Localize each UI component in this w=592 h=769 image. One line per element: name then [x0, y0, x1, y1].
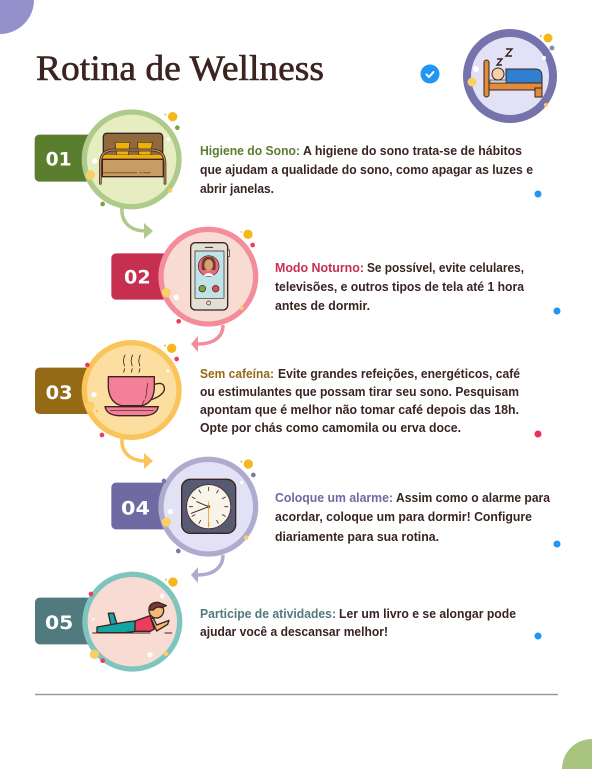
dot: blue 3 [554, 540, 560, 548]
step 4 graphic [111, 459, 256, 554]
ring [84, 112, 179, 207]
dot: blue 1 [534, 190, 542, 198]
text: sem cafeina: Opte por chás como camomila ou erva doce. [200, 421, 461, 435]
text: coloque um alarme: acordar, coloque um para dormir! Configure [275, 510, 532, 524]
ring [84, 343, 179, 437]
arrow 2 to 3 [191, 325, 223, 352]
arrow 3 to 4 [122, 439, 153, 469]
badge 05: 05 [45, 613, 73, 634]
text: modo noturno: antes de dormir. [275, 299, 370, 313]
title: Rotina de Wellness [36, 48, 324, 88]
icon: sleeping in bed [467, 33, 554, 119]
icon: person lying down [93, 602, 172, 633]
text: coloque um alarme: diariamente para sua rotina. [275, 530, 439, 544]
item 5 [35, 574, 516, 669]
text: modo noturno: Se possível, evite celulares, [367, 261, 524, 275]
item 3 [35, 343, 520, 469]
ring [161, 459, 256, 554]
icon: tea cup [105, 355, 164, 416]
arrow 1 to 2 [122, 208, 153, 239]
text: higiene do sono: abrir janelas. [200, 182, 274, 196]
item 2 [111, 229, 525, 352]
badge 02: 02 [124, 267, 151, 288]
arrow 4 to 5 [191, 555, 223, 583]
dot: blue 2 [554, 308, 560, 314]
text: sem cafeina: apontam que é melhor não tomar café depois das 18h. [200, 403, 519, 417]
text: coloque um alarme [275, 491, 551, 544]
icon: check badge [420, 64, 440, 84]
dot: red [534, 430, 542, 438]
icon: clock [182, 479, 236, 533]
text: participe de atividades: Participe de atividades: [200, 607, 336, 621]
badge 04: 04 [121, 498, 150, 519]
item 1 [35, 112, 533, 239]
corner circle: top left [0, 0, 34, 34]
icon: bed [100, 133, 165, 183]
step 1 graphic [35, 112, 180, 207]
badge 01 [35, 135, 95, 182]
badge 02 [111, 253, 171, 300]
item 4 [111, 459, 551, 583]
text: sem cafeina: Sem cafeína: [200, 367, 274, 381]
text: sem cafeina [200, 367, 520, 435]
text: higiene do sono: Higiene do Sono: [200, 144, 300, 158]
ring [161, 229, 256, 324]
text: participe de atividades: Ler um livro e se alongar pode [339, 607, 516, 621]
badge 05 [35, 598, 95, 644]
badge 03 [35, 368, 95, 414]
corner circle: bottom right [562, 739, 592, 769]
step 2 graphic [111, 229, 256, 324]
step 5 graphic [35, 574, 180, 669]
text: modo noturno: televisões, e outros tipos de tela até 1 hora [275, 280, 525, 294]
text: participe de atividades [200, 607, 516, 639]
badge 04 [111, 483, 171, 529]
text: sem cafeina: ou estimulantes que possam tirar seu sono. Pesquisam [200, 385, 519, 399]
text: coloque um alarme: Assim como o alarme para [396, 491, 551, 505]
text: higiene do sono: que ajudam a qualidade do sono, como apagar as luzes e [200, 163, 533, 177]
text: higiene do sono [200, 144, 533, 196]
badge 01: 01 [46, 150, 72, 171]
text: coloque um alarme: Coloque um alarme: [275, 491, 393, 505]
icon: phone [191, 243, 230, 310]
badge 03: 03 [46, 383, 73, 404]
text: participe de atividades: ajudar você a descansar melhor! [200, 625, 388, 639]
text: modo noturno: Modo Noturno: [275, 261, 364, 275]
ring [85, 574, 180, 669]
step 3 graphic [35, 343, 179, 437]
text: sem cafeina: Evite grandes refeições, energéticos, café [278, 367, 520, 381]
text: higiene do sono: A higiene do sono trata-se de hábitos [303, 144, 522, 158]
text: modo noturno [275, 261, 525, 313]
dot: blue 4 [534, 632, 542, 640]
